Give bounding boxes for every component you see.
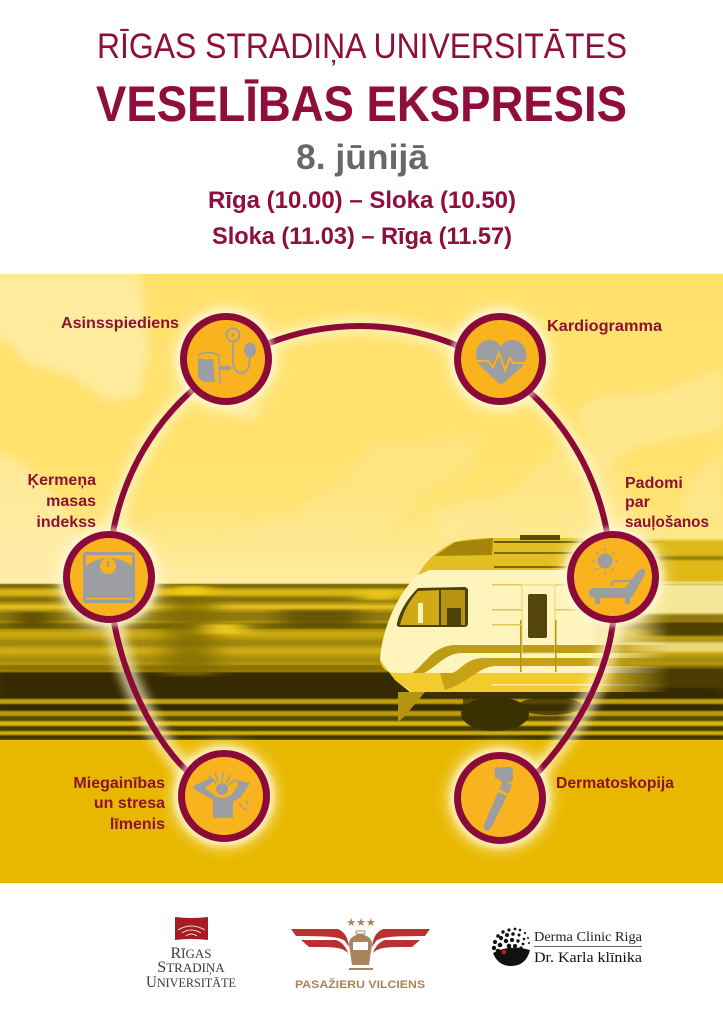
- title: university: RĪGAS STRADIŅA UNIVERSITĀTES: [97, 27, 627, 66]
- train bogies: [461, 698, 582, 731]
- label: sunbathing: par: [625, 494, 650, 511]
- station: dermatoscopy: [458, 756, 542, 840]
- icon: heart with ECG: [476, 340, 526, 385]
- label: body mass index: Ķermeņa: [28, 472, 96, 489]
- logo mark: [175, 917, 208, 940]
- train roof: [418, 538, 666, 575]
- label: sunbathing: [625, 475, 709, 531]
- logo: Pasažieru vilciens: PASAŽIERU VILCIENS: [295, 978, 425, 991]
- label: body mass index: [28, 472, 96, 531]
- station: body mass index: [66, 534, 152, 620]
- station: cardiogram: [458, 316, 542, 402]
- label: blood pressure: Asinsspiediens: [61, 315, 179, 332]
- title: health express: VESELĪBAS EKSPRESIS: [96, 76, 627, 132]
- wings: [291, 929, 430, 953]
- yellow ground: [0, 740, 723, 883]
- ring glow: [109, 326, 614, 798]
- label: sunbathing: sauļošanos: [625, 514, 709, 531]
- label: sleep and stress: līmenis: [110, 816, 165, 833]
- label: body mass index: indekss: [36, 514, 96, 531]
- icon: sun and lounger: [589, 548, 645, 604]
- station: blood pressure: [184, 316, 268, 402]
- icon: blood pressure cuff: [198, 328, 256, 383]
- route: return: Sloka (11.03) – Rīga (11.57): [212, 223, 512, 250]
- label: sunbathing: Padomi: [625, 475, 683, 492]
- train stripes: [412, 645, 666, 673]
- logo: RSU: UNIVERSITĀTE: [146, 974, 236, 991]
- dotted globe: [492, 928, 530, 966]
- icon: scale: [83, 552, 135, 603]
- label: body mass index: masas: [46, 493, 96, 510]
- label: sleep and stress: un stresa: [94, 795, 165, 812]
- train: [380, 535, 666, 692]
- label: cardiogram: Kardiogramma: [547, 318, 662, 335]
- logo: Derma Clinic Riga: Dr. Karla klīnika: [534, 950, 642, 966]
- train emblem: [349, 931, 373, 970]
- logo: RSU: STRADIŅA: [157, 959, 225, 976]
- logo: RSU: RĪGAS: [170, 945, 212, 962]
- label: sleep and stress: [73, 775, 165, 833]
- station glows: [59, 309, 663, 848]
- stars: ★★★: [346, 917, 376, 929]
- logo: Pasažieru vilciens: [291, 917, 430, 991]
- train body: [380, 538, 666, 692]
- photo panel: train and sky: [0, 270, 723, 883]
- train pilot: [398, 692, 425, 722]
- train door: [522, 585, 555, 653]
- date: 8. jūnijā: [296, 138, 429, 177]
- train skirt: [380, 660, 665, 692]
- station: sleep and stress: [182, 754, 266, 838]
- clouds: [0, 270, 723, 590]
- motion blur band: [0, 584, 723, 740]
- route: outbound: Rīga (10.00) – Sloka (10.50): [208, 187, 516, 214]
- logo: RSU: [146, 917, 236, 991]
- icon: stressed person: [193, 772, 250, 818]
- right motion blur: [600, 540, 723, 688]
- label: sleep and stress: Miegainības: [73, 775, 165, 792]
- train windscreen: [397, 587, 468, 627]
- label: dermatoscopy: Dermatoskopija: [556, 775, 674, 792]
- icon: dermatoscope: [484, 767, 513, 831]
- station: sunbathing: [570, 534, 656, 620]
- logo: Derma Clinic Riga: [492, 928, 642, 966]
- logo: Derma Clinic Riga: Derma Clinic Riga: [534, 929, 642, 944]
- fade of ring near stations: [59, 309, 663, 848]
- ring connecting the stations: [109, 326, 614, 798]
